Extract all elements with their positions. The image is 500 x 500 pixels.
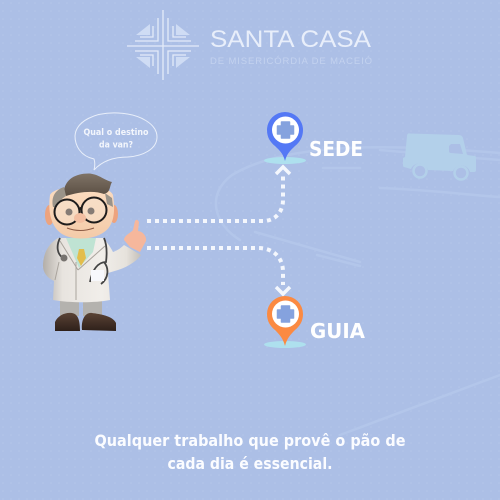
icon: van: [403, 133, 476, 180]
doctor character: [43, 173, 146, 331]
doctor hair: [64, 173, 112, 196]
arrow: to GUIA: [147, 248, 290, 294]
stethoscope card: [91, 270, 104, 281]
doctor legs: [60, 296, 102, 316]
doctor head: [49, 186, 114, 238]
logo wordmark: SANTA CASA: [210, 26, 372, 53]
caption: Qualquer trabalho que provê o pão de: [94, 431, 406, 450]
caption: cada dia é essencial.: [168, 454, 332, 473]
location pin: SEDE: [264, 112, 306, 164]
label: GUIA: GUIA: [310, 319, 366, 343]
doctor ears: [45, 205, 54, 225]
logo emblem: [127, 10, 199, 80]
logo subtitle: DE MISERICÓRDIA DE MACEIÓ: [210, 56, 372, 67]
logo: [127, 10, 372, 80]
doctor glasses: [54, 198, 106, 224]
arrow: to SEDE: [147, 167, 290, 221]
location pin: GUIA: [264, 296, 306, 348]
doctor nose and mouth: [74, 213, 86, 223]
doctor coat: [43, 238, 141, 302]
hand: [124, 220, 146, 252]
speech bubble: [75, 113, 157, 170]
doctor shoes: [55, 313, 116, 331]
doctor collar and tie: [66, 238, 96, 268]
bubble text: Qual o destino: [84, 128, 148, 138]
label: SEDE: SEDE: [309, 137, 363, 161]
bubble text: da van?: [99, 140, 133, 150]
stethoscope: [58, 238, 107, 284]
